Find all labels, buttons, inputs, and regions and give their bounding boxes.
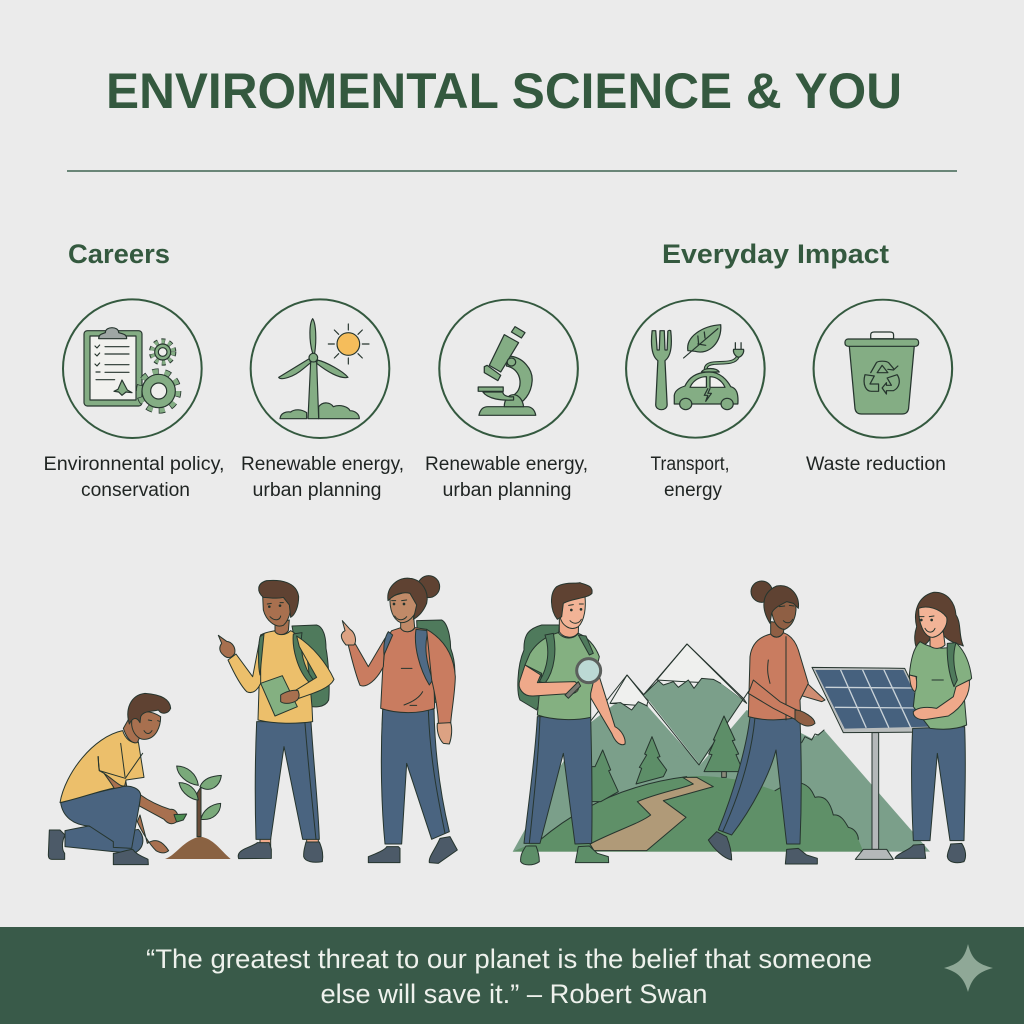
quote line two: else will save it.” – Robert Swan — [320, 979, 708, 1009]
seedling and soil mound — [165, 766, 231, 859]
label: conservation: conservation — [81, 480, 190, 501]
icon: wind turbine and sun — [251, 299, 389, 438]
illustration: solar panel on stand — [812, 667, 933, 859]
label: waste reduction: Waste reduction — [806, 454, 946, 475]
far mountain snow peaks — [610, 644, 747, 706]
label: urban planning 1: urban planning — [252, 480, 382, 501]
figure: woman holding solar panel — [895, 592, 972, 863]
illustration: mountains, hill, trail — [513, 644, 930, 852]
label: renewable energy 2: Renewable energy, — [425, 454, 588, 475]
pine trees — [592, 716, 743, 802]
label: transport: Transport, — [650, 454, 730, 475]
label: environmental policy: Environnental policy, — [44, 454, 224, 475]
footer band — [0, 927, 1024, 1024]
figure: standing person with tablet — [218, 580, 334, 862]
figure: standing woman in terracotta — [341, 576, 457, 863]
icon: policy clipboard and gears — [63, 299, 202, 438]
label: energy: energy — [664, 480, 722, 501]
figure: man with magnifying glass — [518, 583, 625, 865]
title: ENVIROMENTAL SCIENCE & YOU — [106, 63, 902, 119]
heading: careers: Careers — [68, 239, 170, 269]
icon: microscope — [439, 300, 578, 438]
icon: recycling bin — [814, 300, 952, 438]
label: urban planning 2: urban planning — [442, 480, 572, 501]
label: renewable energy 1: Renewable energy, — [241, 454, 404, 475]
icon: fork, leaf, electric car — [626, 300, 765, 438]
figure: woman walking — [708, 581, 825, 864]
icon: four-point star — [944, 944, 993, 992]
heading: everyday impact: Everyday Impact — [662, 239, 889, 269]
figure: kneeling person planting seedling — [48, 693, 231, 865]
quote line one: “The greatest threat to our planet is the belief that someone — [146, 944, 872, 974]
